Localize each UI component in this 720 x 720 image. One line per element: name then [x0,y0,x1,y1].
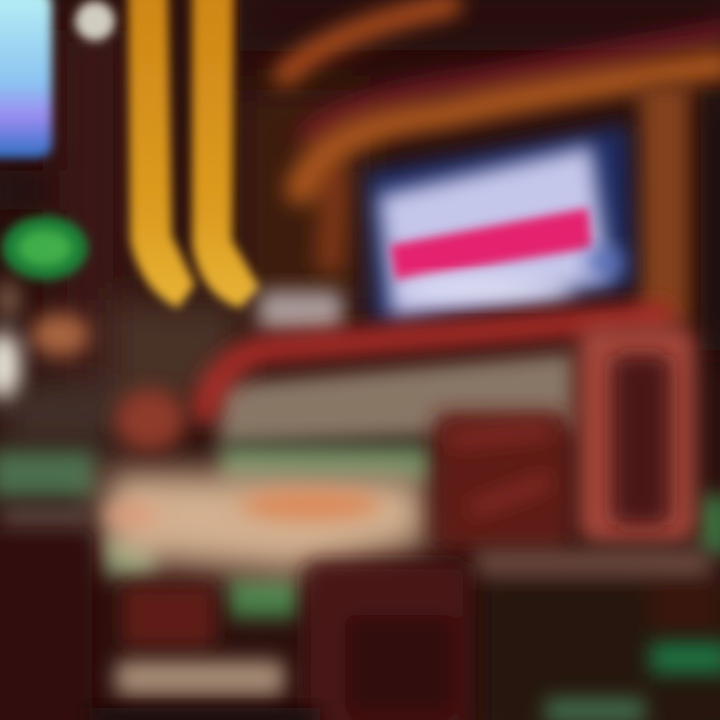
screen frame [365,125,632,325]
screen blue corner [585,248,625,276]
panel: counter wall [215,352,575,445]
chip rim [578,325,696,543]
chip face [612,355,670,525]
chip body [434,412,570,550]
panel: foreground chips centre [304,562,470,720]
panel: chip stack centre [434,412,570,550]
panel: cream table area [105,470,430,575]
panel: orange table marking [102,490,380,527]
panel: foreground green felt [545,642,720,720]
chip highlights [450,430,550,510]
panel: bottom edge shadow [90,708,320,720]
background wall tones [0,0,720,445]
panel: wall arcs [285,5,720,260]
panel: red counter [205,316,660,410]
panel: display screen [365,125,632,325]
panel: foreground chips right [475,550,720,720]
icon: white lamp [75,1,115,41]
panel: right column [640,85,690,325]
screen light area [378,145,610,318]
icon: green sign [2,216,88,280]
panel: foreground chips left [0,530,216,720]
panel: chip stack right [578,325,696,543]
panel: yellow columns [128,0,260,308]
panel: column bases [258,290,343,332]
panel: foreground table cream [0,510,285,696]
panel: red chip near column [114,388,186,452]
panel: green table [0,445,720,618]
screen pale strip [405,277,575,303]
panel: left glowing lights [0,280,90,399]
panel: cyan screen [0,0,52,158]
screen pink bar [390,208,592,280]
